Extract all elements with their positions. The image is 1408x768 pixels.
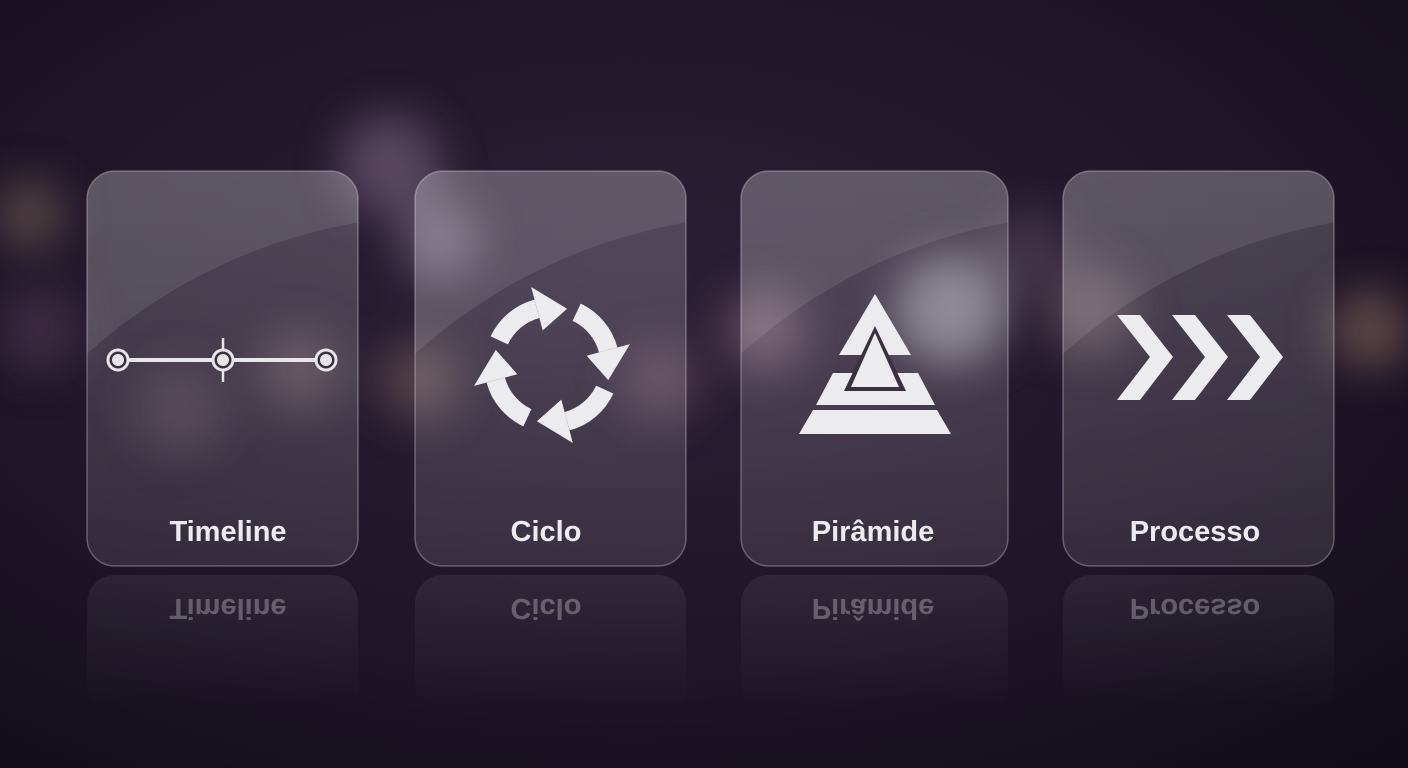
label: Pirâmide: Pirâmide	[812, 516, 934, 548]
label: Timeline: Timeline	[169, 516, 287, 548]
label: Ciclo: Ciclo	[511, 516, 581, 548]
reflections: Timeline	[169, 592, 287, 624]
reflections: Pirâmide	[812, 592, 934, 624]
reflections	[87, 575, 1334, 715]
card: Pirâmide	[734, 160, 1010, 566]
card: Timeline	[80, 160, 360, 566]
card: Processo	[1056, 160, 1336, 566]
reflections: Ciclo	[511, 592, 581, 624]
icon: timeline	[108, 338, 336, 382]
icon: chevrons	[1117, 315, 1283, 400]
icon: cycle arrows	[474, 287, 630, 443]
reflections: Processo	[1130, 592, 1260, 624]
icon: pyramid	[799, 294, 951, 434]
label: Processo: Processo	[1130, 516, 1260, 548]
card: Ciclo	[408, 160, 688, 566]
